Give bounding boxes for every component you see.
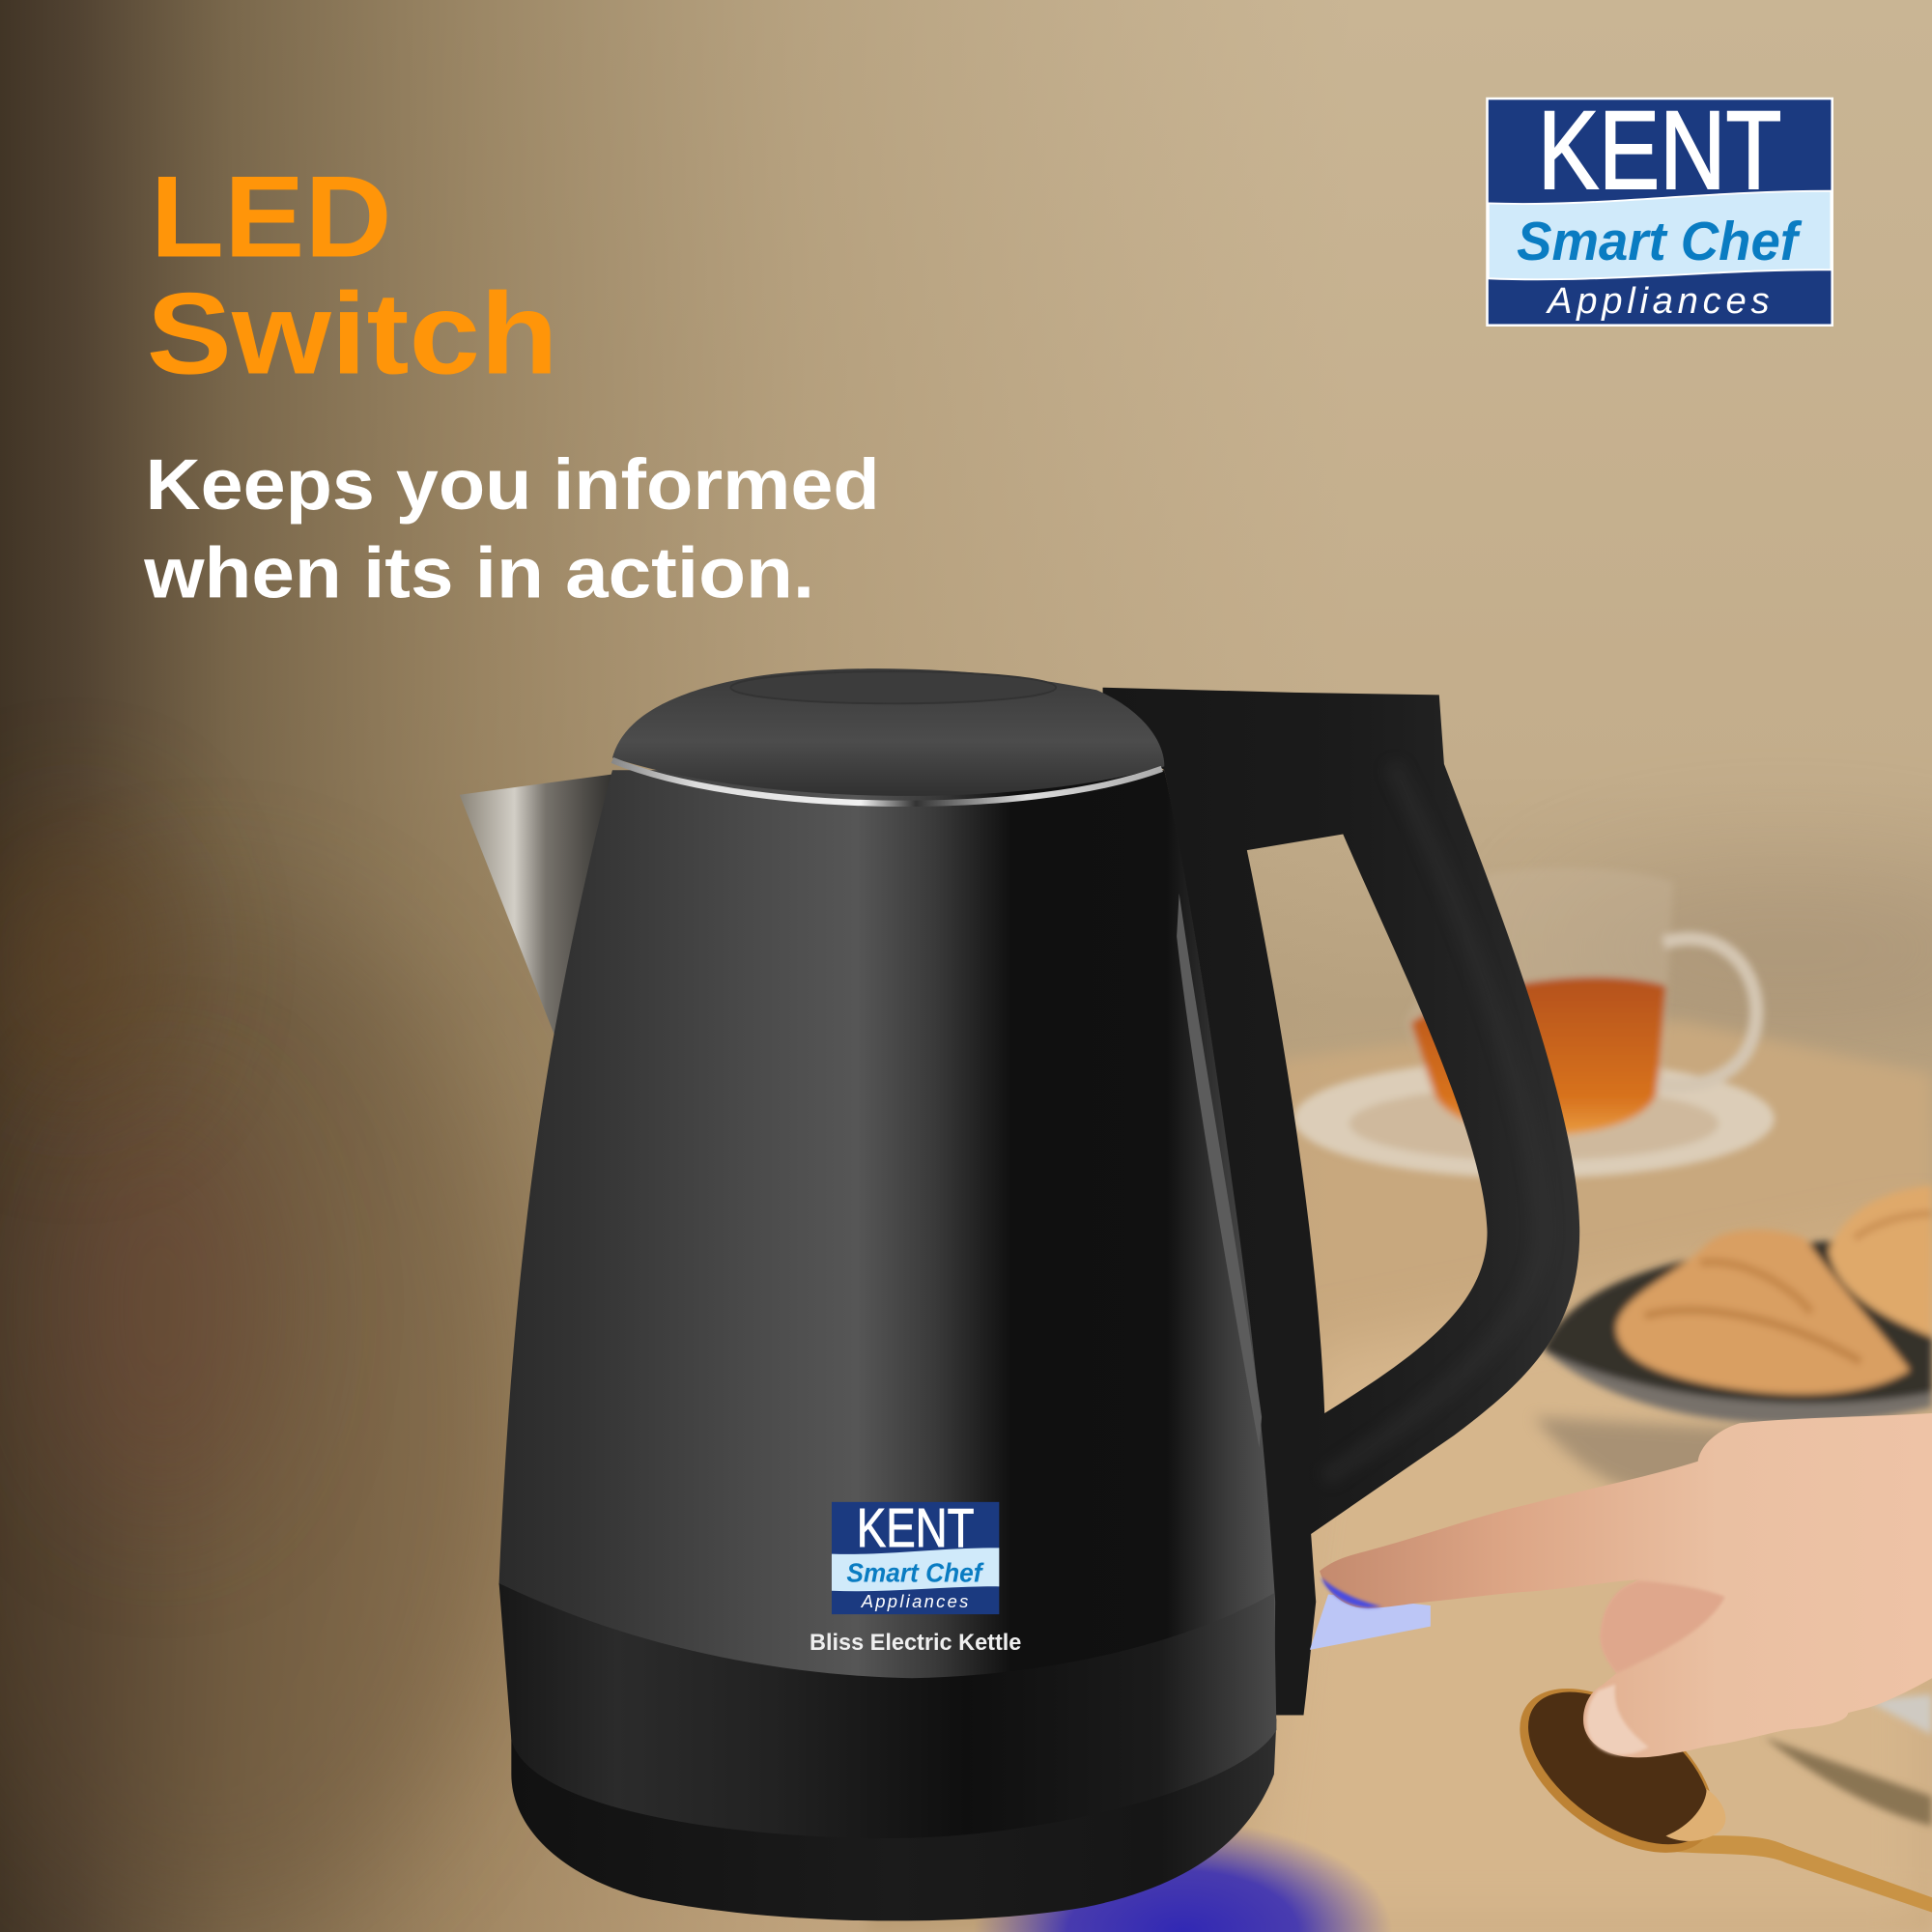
blurred plate with pastries bbox=[1543, 1185, 1932, 1424]
kettle bbox=[460, 668, 1579, 1920]
darker lower-left tone bbox=[0, 899, 529, 1932]
kettle logo badge bbox=[832, 1497, 999, 1614]
subheading text: when its in action. bbox=[143, 533, 814, 613]
silver lid rim bbox=[612, 760, 1162, 804]
blurred hand shadow on the table bbox=[1534, 1417, 1749, 1494]
kettle logo badge: Smart Chef bbox=[846, 1557, 984, 1587]
kettle body bbox=[499, 770, 1275, 1725]
KENT Smart Chef Appliances logo: Appliances bbox=[1546, 280, 1770, 322]
heading: LED Switch: LED bbox=[151, 152, 392, 281]
table top on the right bbox=[863, 1021, 1932, 1932]
blurred tea cup and saucer bbox=[1293, 868, 1775, 1178]
handle side reflection bbox=[1177, 894, 1262, 1448]
thumb nail bbox=[1586, 1685, 1649, 1755]
kettle lid bbox=[612, 668, 1164, 796]
subheading text bbox=[143, 444, 880, 613]
kettle spout bbox=[460, 774, 616, 1035]
kettle model name: Bliss Electric Kettle bbox=[810, 1630, 1021, 1655]
kettle bottom ring bbox=[511, 1719, 1276, 1920]
kettle logo badge: Appliances bbox=[861, 1591, 968, 1611]
knife bbox=[1765, 1694, 1932, 1826]
KENT Smart Chef Appliances logo: Smart Chef bbox=[1517, 211, 1803, 271]
spoon handle bbox=[1658, 1835, 1932, 1913]
lid top button bbox=[730, 671, 1056, 703]
spoon bbox=[1491, 1656, 1932, 1913]
KENT Smart Chef Appliances logo bbox=[1486, 89, 1833, 327]
hand pressing the switch bbox=[1320, 1413, 1932, 1757]
heading: LED Switch: Switch bbox=[147, 269, 558, 398]
heading: LED Switch bbox=[147, 152, 558, 398]
power switch lit blue bbox=[1310, 1595, 1431, 1650]
subheading text: Keeps you informed bbox=[146, 444, 880, 525]
wall shadow above the table bbox=[1540, 875, 1932, 1023]
fingertip blue glow bbox=[1321, 1577, 1382, 1608]
KENT Smart Chef Appliances logo: KENT bbox=[1538, 89, 1781, 213]
handle grip highlight bbox=[1324, 764, 1543, 1479]
kettle base band bbox=[499, 1583, 1276, 1838]
blue light glow on the table bbox=[974, 1821, 1392, 1932]
kettle handle bbox=[1103, 688, 1579, 1716]
curled finger shading bbox=[1601, 1580, 1725, 1673]
kettle logo badge: KENT bbox=[857, 1497, 975, 1558]
spoon bowl bbox=[1491, 1656, 1743, 1886]
